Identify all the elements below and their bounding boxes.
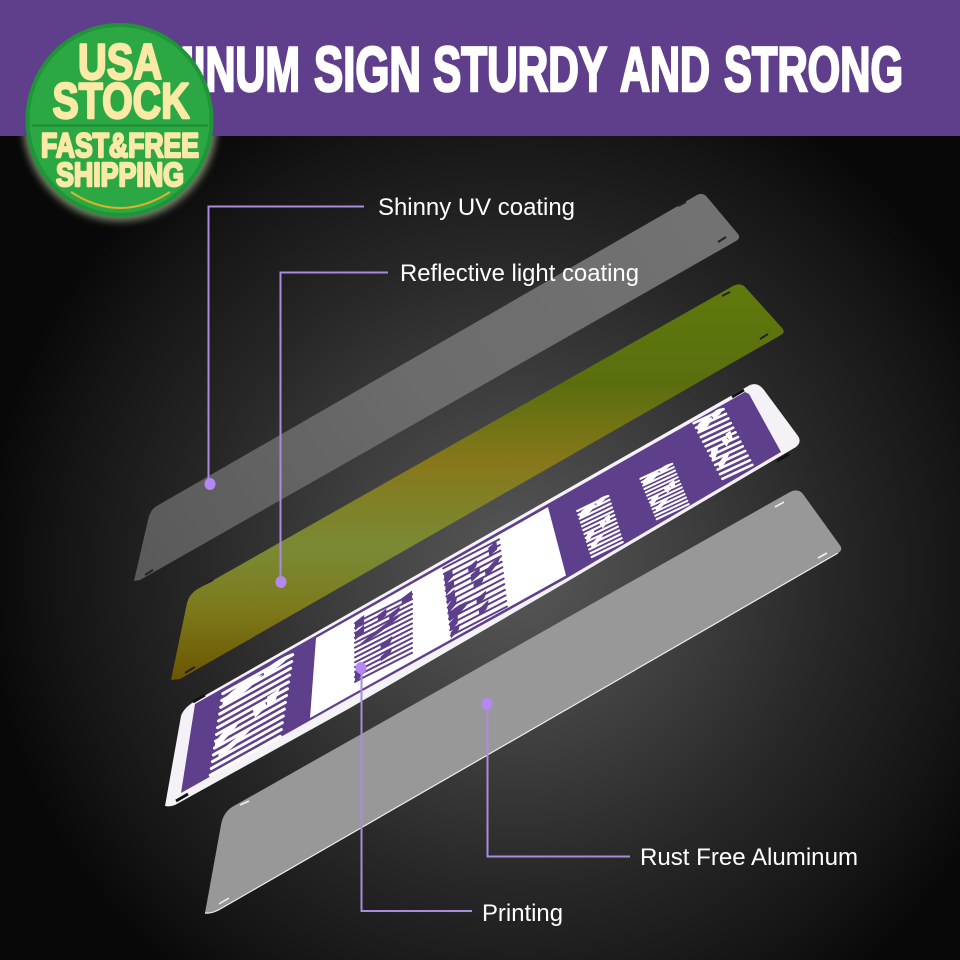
purple print field — [181, 392, 781, 793]
sign word: second white word — [443, 539, 507, 638]
callout: Reflective light coating: Reflective light coating — [400, 260, 639, 287]
sign word: right B — [640, 462, 689, 519]
layer: printed sign — [165, 384, 800, 806]
title: SIGN — [314, 35, 421, 105]
sign word: right C — [693, 407, 752, 479]
callout: Shinny UV coating — [204, 194, 575, 490]
title — [74, 35, 903, 105]
white band — [310, 507, 566, 718]
badge: USA stock: FAST&FREE — [41, 127, 199, 165]
title: ALUMINUM — [74, 35, 300, 105]
sign word: right A — [577, 494, 623, 557]
badge: USA stock: STOCK — [52, 73, 190, 129]
sign word: left — [210, 652, 293, 775]
title: AND — [620, 35, 710, 105]
sign word: FREE — [355, 591, 412, 683]
badge: USA stock: SHIPPING — [56, 156, 184, 193]
callout: Rust Free Aluminum: Rust Free Aluminum — [640, 844, 858, 871]
layer: aluminum panel — [205, 490, 841, 913]
header band — [0, 0, 960, 136]
badge: USA stock: USA — [78, 34, 162, 90]
badge: USA stock — [23, 23, 217, 221]
title: STURDY — [433, 35, 607, 105]
sign white base — [165, 384, 800, 806]
callout: Reflective light coating — [276, 260, 639, 588]
layer: reflective coating panel — [171, 284, 784, 680]
callout: Printing — [356, 662, 563, 927]
layer: UV coating panel — [134, 194, 739, 581]
callout: Shinny UV coating: Shinny UV coating — [378, 194, 575, 221]
callout: Rust Free Aluminum — [482, 698, 858, 871]
callout: Printing: Printing — [482, 900, 563, 927]
